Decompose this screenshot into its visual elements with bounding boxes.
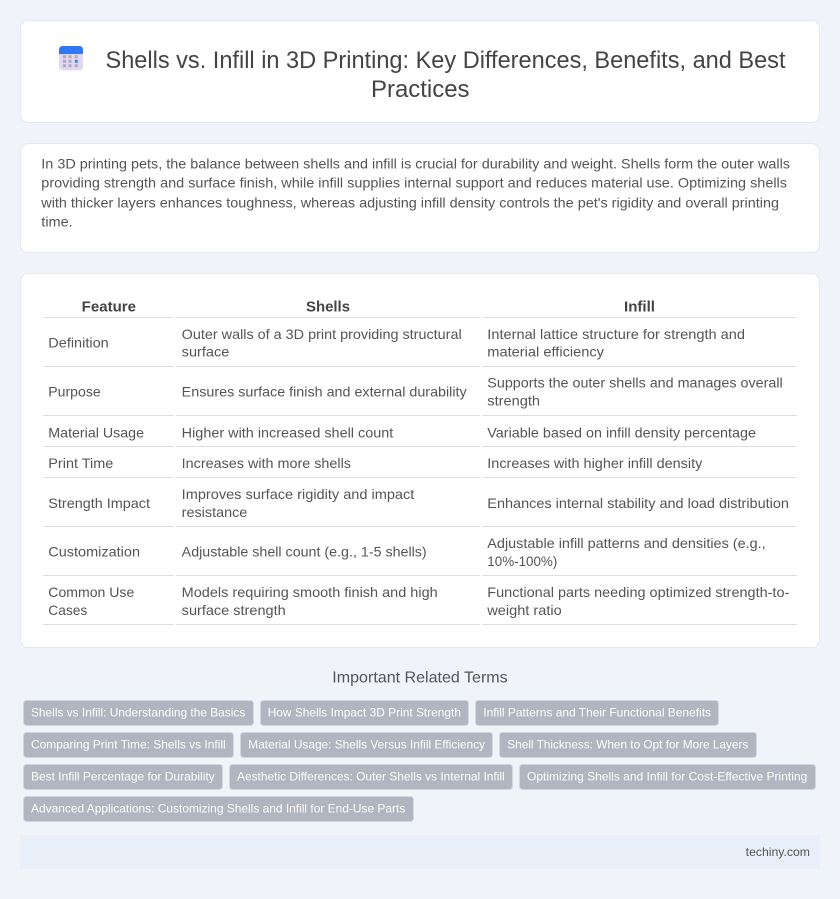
table row: Purpose: Supports the outer shells and manages overall xyxy=(487,375,783,391)
table header row: Feature xyxy=(82,299,136,316)
table row: Definition: Definition xyxy=(48,335,109,351)
table row: Purpose xyxy=(43,375,797,416)
tag: comparing print time: Comparing Print Time: Shells vs Infill xyxy=(31,738,226,752)
table row: Common Use Cases xyxy=(43,584,797,625)
table row: Strength Impact: resistance xyxy=(182,504,248,520)
table row: Strength Impact xyxy=(43,486,797,527)
table row: Definition: material efficiency xyxy=(487,344,604,360)
tag: best infill percentage: Best Infill Percentage for Durability xyxy=(31,770,215,784)
footer: techiny.com xyxy=(746,845,810,859)
panel: comparison table xyxy=(20,274,820,648)
tag: advanced applications: Advanced Applications: Customizing Shells and Infill for End-Use Parts xyxy=(31,802,405,816)
table row: Strength Impact: Strength Impact xyxy=(48,495,150,511)
table row: Common Use Cases: Cases xyxy=(48,602,87,618)
table row: Definition: surface xyxy=(182,344,230,360)
table row: Definition xyxy=(43,326,797,367)
tag: shells impact strength: How Shells Impact 3D Print Strength xyxy=(268,706,461,720)
tag: cost-effective printing xyxy=(520,764,816,790)
table row: Common Use Cases: weight ratio xyxy=(486,602,562,618)
tag: infill patterns: Infill Patterns and Their Functional Benefits xyxy=(483,706,711,720)
table header row xyxy=(43,299,797,318)
table row: Material Usage: Higher with increased shell count xyxy=(182,424,393,440)
tag: shells impact strength xyxy=(260,700,468,726)
table row: Purpose: Purpose xyxy=(48,384,101,400)
table row: Print Time: Print Time xyxy=(48,455,114,471)
text block: introduction paragraph: time. xyxy=(41,214,73,230)
icon: calendar grid xyxy=(59,46,83,70)
table row: Definition: Internal lattice structure for strength and xyxy=(487,326,745,342)
tag: infill patterns xyxy=(476,700,718,726)
tag: shell thickness: Shell Thickness: When to Opt for More Layers xyxy=(507,738,748,752)
table header row: Infill xyxy=(624,299,655,316)
table row: Common Use Cases: Functional parts needing optimized strength-to- xyxy=(487,584,790,600)
footer xyxy=(20,835,820,869)
table row: Material Usage xyxy=(43,424,797,447)
tag: understanding the basics xyxy=(24,700,254,726)
table row: Strength Impact: Improves surface rigidity and impact xyxy=(182,486,414,502)
table row: Customization xyxy=(43,535,797,576)
table row: Customization: Customization xyxy=(48,544,140,560)
tag: best infill percentage xyxy=(24,764,222,790)
table row: Customization: Adjustable shell count (e.g., 1-5 shells) xyxy=(182,544,427,560)
table row: Common Use Cases: surface strength xyxy=(182,602,286,618)
tag: understanding the basics: Shells vs Infill: Understanding the Basics xyxy=(31,706,245,720)
tag: cost-effective printing: Optimizing Shells and Infill for Cost-Effective Printing xyxy=(527,770,807,784)
table header row: Shells xyxy=(306,299,350,316)
panel: related term tags xyxy=(24,700,816,822)
tag: material usage: Material Usage: Shells Versus Infill Efficiency xyxy=(248,738,485,752)
tag: shell thickness xyxy=(500,732,756,758)
text block: introduction paragraph: providing strength and surface finish, while infill supplies internal support and reduces material use. Optimizing shells xyxy=(41,175,787,191)
tag: aesthetic differences: Aesthetic Differences: Outer Shells vs Internal Infill xyxy=(237,770,505,784)
table row: Purpose: Ensures surface finish and external durability xyxy=(182,384,467,400)
table row: Print Time: Increases with more shells xyxy=(182,455,351,471)
tag: aesthetic differences xyxy=(230,764,512,790)
text block: introduction paragraph xyxy=(40,155,790,230)
text block: introduction paragraph: In 3D printing pets, the balance between shells and infill is crucial for durability and weight. Shells form the outer walls xyxy=(41,155,790,171)
title: Practices xyxy=(371,76,470,103)
table row: Purpose: strength xyxy=(487,393,540,409)
table row: Customization: 10%-100%) xyxy=(487,553,557,569)
table row: Print Time: Increases with higher infill density xyxy=(487,455,702,471)
table row: Common Use Cases: Common Use xyxy=(48,584,135,600)
table row: Definition: Outer walls of a 3D print providing structural xyxy=(182,326,462,342)
table row: Customization: Adjustable infill patterns and densities (e.g., xyxy=(487,535,766,551)
table row: Material Usage: Material Usage xyxy=(48,424,144,440)
table row: Print Time xyxy=(43,455,797,478)
table row: Common Use Cases: Models requiring smooth finish and high xyxy=(182,584,438,600)
tag: material usage xyxy=(240,732,492,758)
panel: title header xyxy=(20,20,820,122)
tag: advanced applications xyxy=(24,796,414,822)
panel: introduction xyxy=(20,144,820,252)
table row: Material Usage: Variable based on infill density percentage xyxy=(487,424,756,440)
title xyxy=(106,47,786,103)
heading: important related terms: Important Related Terms xyxy=(332,670,508,687)
tag: comparing print time xyxy=(24,732,234,758)
table row: Strength Impact: Enhances internal stability and load distribution xyxy=(487,495,789,511)
text block: introduction paragraph: with thicker layers enhances toughness, whereas adjusting infill density controls the pet's rigidity and overall printing xyxy=(40,194,779,210)
title: Shells vs. Infill in 3D Printing: Key Differences, Benefits, and Best xyxy=(106,47,786,74)
